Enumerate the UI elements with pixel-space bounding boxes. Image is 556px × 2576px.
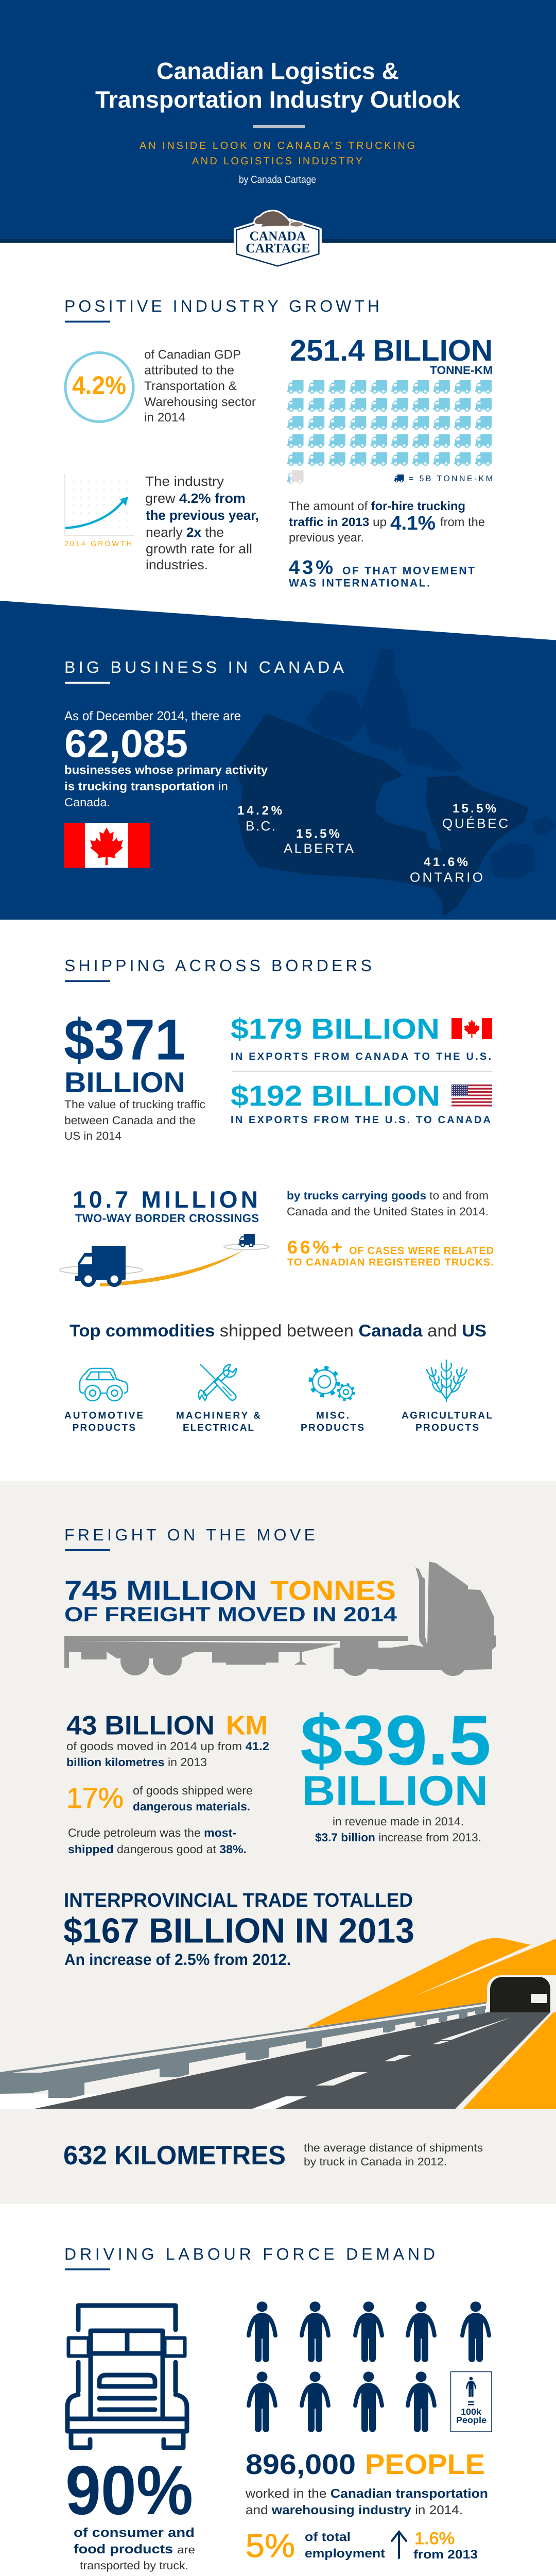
icon: truck front [67,2306,187,2448]
stat: 17% dangerous materials [66,1782,253,1814]
stat: 896,000 people: 896,000 [246,2448,356,2480]
stat: 62,085 businesses: is trucking transportation in [64,779,228,793]
panel: big business in Canada [0,601,556,920]
stat: 5% of total employment: 5% [246,2527,295,2564]
logo: Canada Cartage header badge [235,211,320,267]
icon: car [80,1368,128,1401]
stat: 632 kilometres: the average distance of shipments [304,2142,483,2154]
text block: for-hire trucking traffic: 4.1% [390,513,436,534]
text block: industry growth: growth rate for all [146,541,252,556]
map labels: provincial shares: ALBERTA [284,841,354,856]
stat: 17% dangerous materials: dangerous materials. [133,1800,250,1813]
stat: 62,085 businesses [64,709,268,809]
stat: 62,085 businesses: As of December 2014, there are [64,709,241,723]
labels: commodity categories: ELECTRICAL [183,1422,254,1433]
logo: Canada Cartage header badge: CARTAGE [246,241,310,256]
stat: 43% international: 43% [289,557,333,579]
title: 745 million tonnes [64,1575,397,1626]
heading: shipping across borders: SHIPPING ACROSS BORDERS [64,956,372,975]
stat: 4.2% of GDP: attributed to the [144,364,234,377]
stat: 90% consumer products: 90% [65,2451,193,2529]
stat: 251.4 billion tonne-km: TONNE-KM [430,364,493,377]
stat: 66% Canadian registered [287,1236,494,1268]
stat: 90% consumer products: of consumer and [74,2526,195,2540]
legend: person equals 100k people: People [456,2415,486,2425]
subtitle [140,140,415,167]
text block: industry growth [145,473,259,572]
stat: 90% consumer products: transported by truck. [80,2559,188,2572]
labels: commodity categories: MISC. [316,1411,349,1421]
text block: border crossings detail: Canada and the United States in 2014. [287,1205,489,1218]
icon: tools [199,1364,236,1400]
text block: crude petroleum: shipped dangerous good at 38%. [68,1843,247,1856]
stat: $371 billion: between Canada and the [64,1114,196,1127]
stat: US to Canada exports: IN EXPORTS FROM THE U.S. TO CANADA [231,1114,491,1126]
stat: $371 billion [64,1008,205,1142]
stat: 4.2% of GDP: 4.2% [72,371,126,400]
stat: 10.7 million border crossings [73,1186,259,1225]
heading: freight on the move: FREIGHT ON THE MOVE [64,1526,315,1544]
stat: $371 billion: The value of trucking traffic [64,1098,205,1111]
labels: commodity categories: MACHINERY & [176,1411,260,1421]
stat: 90% consumer products: food products are [74,2542,195,2556]
stat: 17% dangerous materials: 17% [66,1782,124,1814]
chart: 2014 growth arrow: 2014 GROWTH [64,539,132,548]
stat: $371 billion: BILLION [64,1066,185,1098]
map labels: provincial shares: 14.2% [237,804,282,818]
text block: industry growth: nearly 2x the [146,524,224,540]
text block: crude petroleum: Crude petroleum was the most- [68,1826,236,1839]
title: Canadian Logistics & [157,58,399,84]
panel: freight on the move [0,1481,556,2204]
stat: 4.2% of GDP: in 2014 [144,411,185,425]
panel: header [0,0,556,243]
stat: $39.5 billion revenue [300,1701,491,1844]
stat: 251.4 billion tonne-km: 251.4 BILLION [290,334,493,367]
stat: 62,085 businesses: businesses whose primary activity [64,763,268,776]
map labels: provincial shares [237,802,508,885]
stat: 5% of total employment: 1.6% [414,2529,455,2548]
icon: wheat [427,1360,467,1401]
title: Transportation Industry Outlook [95,86,460,113]
map: Canada silhouette [231,648,556,917]
labels: commodity categories: PRODUCTS [415,1422,479,1433]
stat: 66% Canadian registered: OF CASES WERE RELATED [349,1245,494,1257]
map labels: provincial shares: 41.6% [424,855,468,869]
stat: 896,000 people: and warehousing industry in 2014. [246,2503,463,2517]
text block: industry growth: the previous year, [146,507,259,523]
logo: Canada Cartage header badge: CANADA [250,229,306,244]
stat: 66% Canadian registered: 66%+ [287,1236,342,1258]
stat: 5% of total employment: of total [305,2530,351,2544]
heading: top commodities: Top commodities shipped between Canada and US [70,1321,486,1340]
labels: commodity categories: AUTOMOTIVE [64,1411,143,1421]
map labels: provincial shares: B.C. [246,818,275,834]
chart: 2014 growth arrow [64,474,134,548]
stat: 4.2% of GDP: of Canadian GDP [144,348,241,362]
stat: 43 billion km: 43 BILLION [66,1710,215,1740]
icon: gears [310,1368,354,1400]
labels: commodity categories [64,1411,492,1433]
stat: $371 billion: US in 2014 [64,1129,121,1142]
map labels: provincial shares: ONTARIO [410,870,483,885]
title: 745 million tonnes: 745 MILLION [64,1575,257,1606]
stat: 62,085 businesses: 62,085 [64,722,188,766]
map labels: provincial shares: 15.5% [296,827,340,841]
stat: US to Canada exports [231,1079,492,1126]
subtitle: AN INSIDE LOOK ON CANADA’S TRUCKING [140,140,415,151]
stat: 632 kilometres: by truck in Canada in 2012. [304,2156,447,2168]
title: 745 million tonnes: OF FREIGHT MOVED IN 2014 [64,1603,397,1626]
stat: 10.7 million border crossings: 10.7 MILLION [73,1186,258,1213]
stat: Canada to US exports: $179 BILLION [231,1012,440,1045]
stat: 43% international: OF THAT MOVEMENT [342,565,475,577]
stat: Canada to US exports [231,1012,492,1072]
labels: commodity categories: PRODUCTS [301,1422,364,1433]
stat: 896,000 people: PEOPLE [365,2448,485,2480]
map labels: provincial shares: 15.5% [453,802,496,816]
illustration: highway and tunnel [0,1938,556,2109]
text block: for-hire trucking traffic [289,499,485,544]
heading: big business: BIG BUSINESS IN CANADA [64,658,344,676]
labels: commodity categories: AGRICULTURAL [402,1411,492,1421]
text block: for-hire trucking traffic: The amount of for-hire trucking [289,499,465,513]
stat: 896,000 people [245,2448,488,2517]
text block: industry growth: The industry [145,473,224,489]
stat: 43 billion km: KM [226,1710,268,1740]
text block: industry growth: industries. [146,557,208,572]
stat: 62,085 businesses: Canada. [64,795,110,809]
stat: 43 billion km [66,1710,269,1769]
stat: 5% of total employment [246,2527,478,2564]
stat: 43 billion km: of goods moved in 2014 up from 41.2 [66,1740,269,1753]
stat: 4.2% of GDP [65,348,256,425]
stat: $39.5 billion revenue: $39.5 [300,1701,491,1780]
stat: 17% dangerous materials: of goods shipped were [133,1784,253,1797]
byline: by Canada Cartage [239,174,316,185]
legend: truck equals 5B tonne-km: = 5B TONNE-KM [409,474,493,483]
stat: 43% international [289,557,475,589]
stat: 896,000 people: worked in the Canadian transportation [245,2487,488,2501]
stat: 43 billion km: billion kilometres in 2013 [66,1756,207,1769]
stat: 43% international: WAS INTERNATIONAL. [289,577,430,589]
text block: industry growth: grew 4.2% from [145,490,246,506]
text block: for-hire trucking traffic: from the [440,515,485,529]
stat: interprovincial trade: An increase of 2.5% from 2012. [64,1951,291,1969]
legend: person equals 100k people [451,2372,492,2432]
stat: US to Canada exports: $192 BILLION [231,1079,440,1112]
map labels: provincial shares: QUÉBEC [442,816,508,831]
legend: person equals 100k people: 100k [461,2407,482,2417]
stat: interprovincial trade [63,1890,414,1969]
heading: driving labour force demand: DRIVING LABOUR FORCE DEMAND [64,2245,435,2263]
stat: 5% of total employment: employment [305,2547,385,2561]
stat: 4.2% of GDP: Transportation & [144,379,237,393]
stat: 90% consumer products [65,2451,195,2572]
stat: $39.5 billion revenue: $3.7 billion increase from 2013. [315,1831,481,1844]
icon: Canadian flag [64,823,150,868]
text block: for-hire trucking traffic: previous year. [289,531,364,544]
stat: 10.7 million border crossings: TWO-WAY BORDER CROSSINGS [75,1212,259,1225]
stat: 66% Canadian registered: TO CANADIAN REGISTERED TRUCKS. [287,1257,494,1268]
text block: for-hire trucking traffic: traffic in 2013 up [289,515,387,529]
title: 745 million tonnes: TONNES [270,1575,396,1606]
pictogram: people, each 100k [247,2301,491,2432]
stat: Canada to US exports: IN EXPORTS FROM CANADA TO THE U.S. [231,1051,491,1062]
text block: border crossings detail [287,1189,489,1218]
stat: $39.5 billion revenue: BILLION [302,1768,488,1815]
stat: interprovincial trade: $167 BILLION IN 2013 [63,1911,414,1951]
illustration: truck crossing the border [59,1234,269,1287]
text block: border crossings detail: by trucks carrying goods to and from [287,1189,489,1202]
stat: interprovincial trade: INTERPROVINCIAL TRADE TOTALLED [64,1890,413,1911]
stat: $371 billion: $371 [64,1008,185,1072]
stat: 5% of total employment: from 2013 [413,2548,478,2562]
heading: positive industry growth: POSITIVE INDUSTRY GROWTH [64,297,379,315]
subtitle: AND LOGISTICS INDUSTRY [192,156,362,167]
illustration: truck silhouette [64,1562,496,1676]
stat: 632 kilometres [63,2141,483,2171]
stat: $39.5 billion revenue: in revenue made in 2014. [333,1815,464,1828]
stat: 632 kilometres: 632 KILOMETRES [63,2141,286,2171]
pictogram: truck grid, each truck 5B tonne-km [287,380,492,484]
labels: commodity categories: PRODUCTS [72,1422,135,1433]
stat: 4.2% of GDP: Warehousing sector [144,395,256,409]
title [95,58,460,113]
text block: crude petroleum [68,1826,247,1856]
